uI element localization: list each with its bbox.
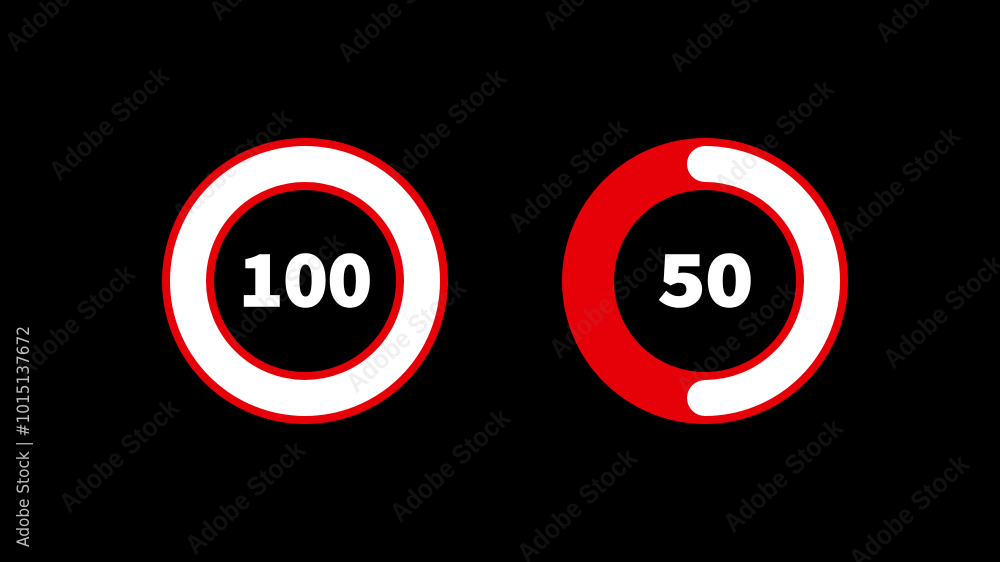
stock watermarks: Adobe Stock	[179, 434, 311, 560]
white half progress arc	[705, 164, 822, 398]
stock watermarks: Adobe Stock	[708, 73, 840, 199]
stock watermarks: Adobe Stock	[218, 226, 350, 352]
stock watermarks: Adobe Stock	[380, 62, 512, 188]
red ring background	[188, 164, 422, 398]
stock watermarks: Adobe Stock	[717, 412, 849, 538]
stock watermarks: Adobe Stock	[384, 402, 516, 528]
vertical stock id caption: Adobe Stock | #1015137672	[14, 326, 34, 547]
stock watermarks: Adobe Stock	[670, 275, 802, 401]
value 100: 100	[239, 226, 372, 327]
white full progress ring	[188, 164, 422, 398]
stock watermarks: Adobe Stock	[543, 238, 675, 364]
stock watermarks: Adobe Stock	[502, 112, 634, 238]
stock watermarks: Adobe Stock	[53, 392, 185, 518]
gauge: 50 percent	[588, 164, 822, 398]
value 50: 50	[658, 226, 753, 327]
stock watermarks: Adobe Stock	[340, 272, 472, 398]
gauge: 100 percent	[188, 164, 422, 398]
stock watermarks: Adobe Stock	[43, 60, 175, 186]
stock watermarks: Adobe Stock	[834, 120, 966, 246]
stock watermarks: Adobe Stock	[166, 102, 298, 228]
red ring track	[588, 164, 822, 398]
stock watermarks: Adobe Stock	[9, 258, 141, 384]
